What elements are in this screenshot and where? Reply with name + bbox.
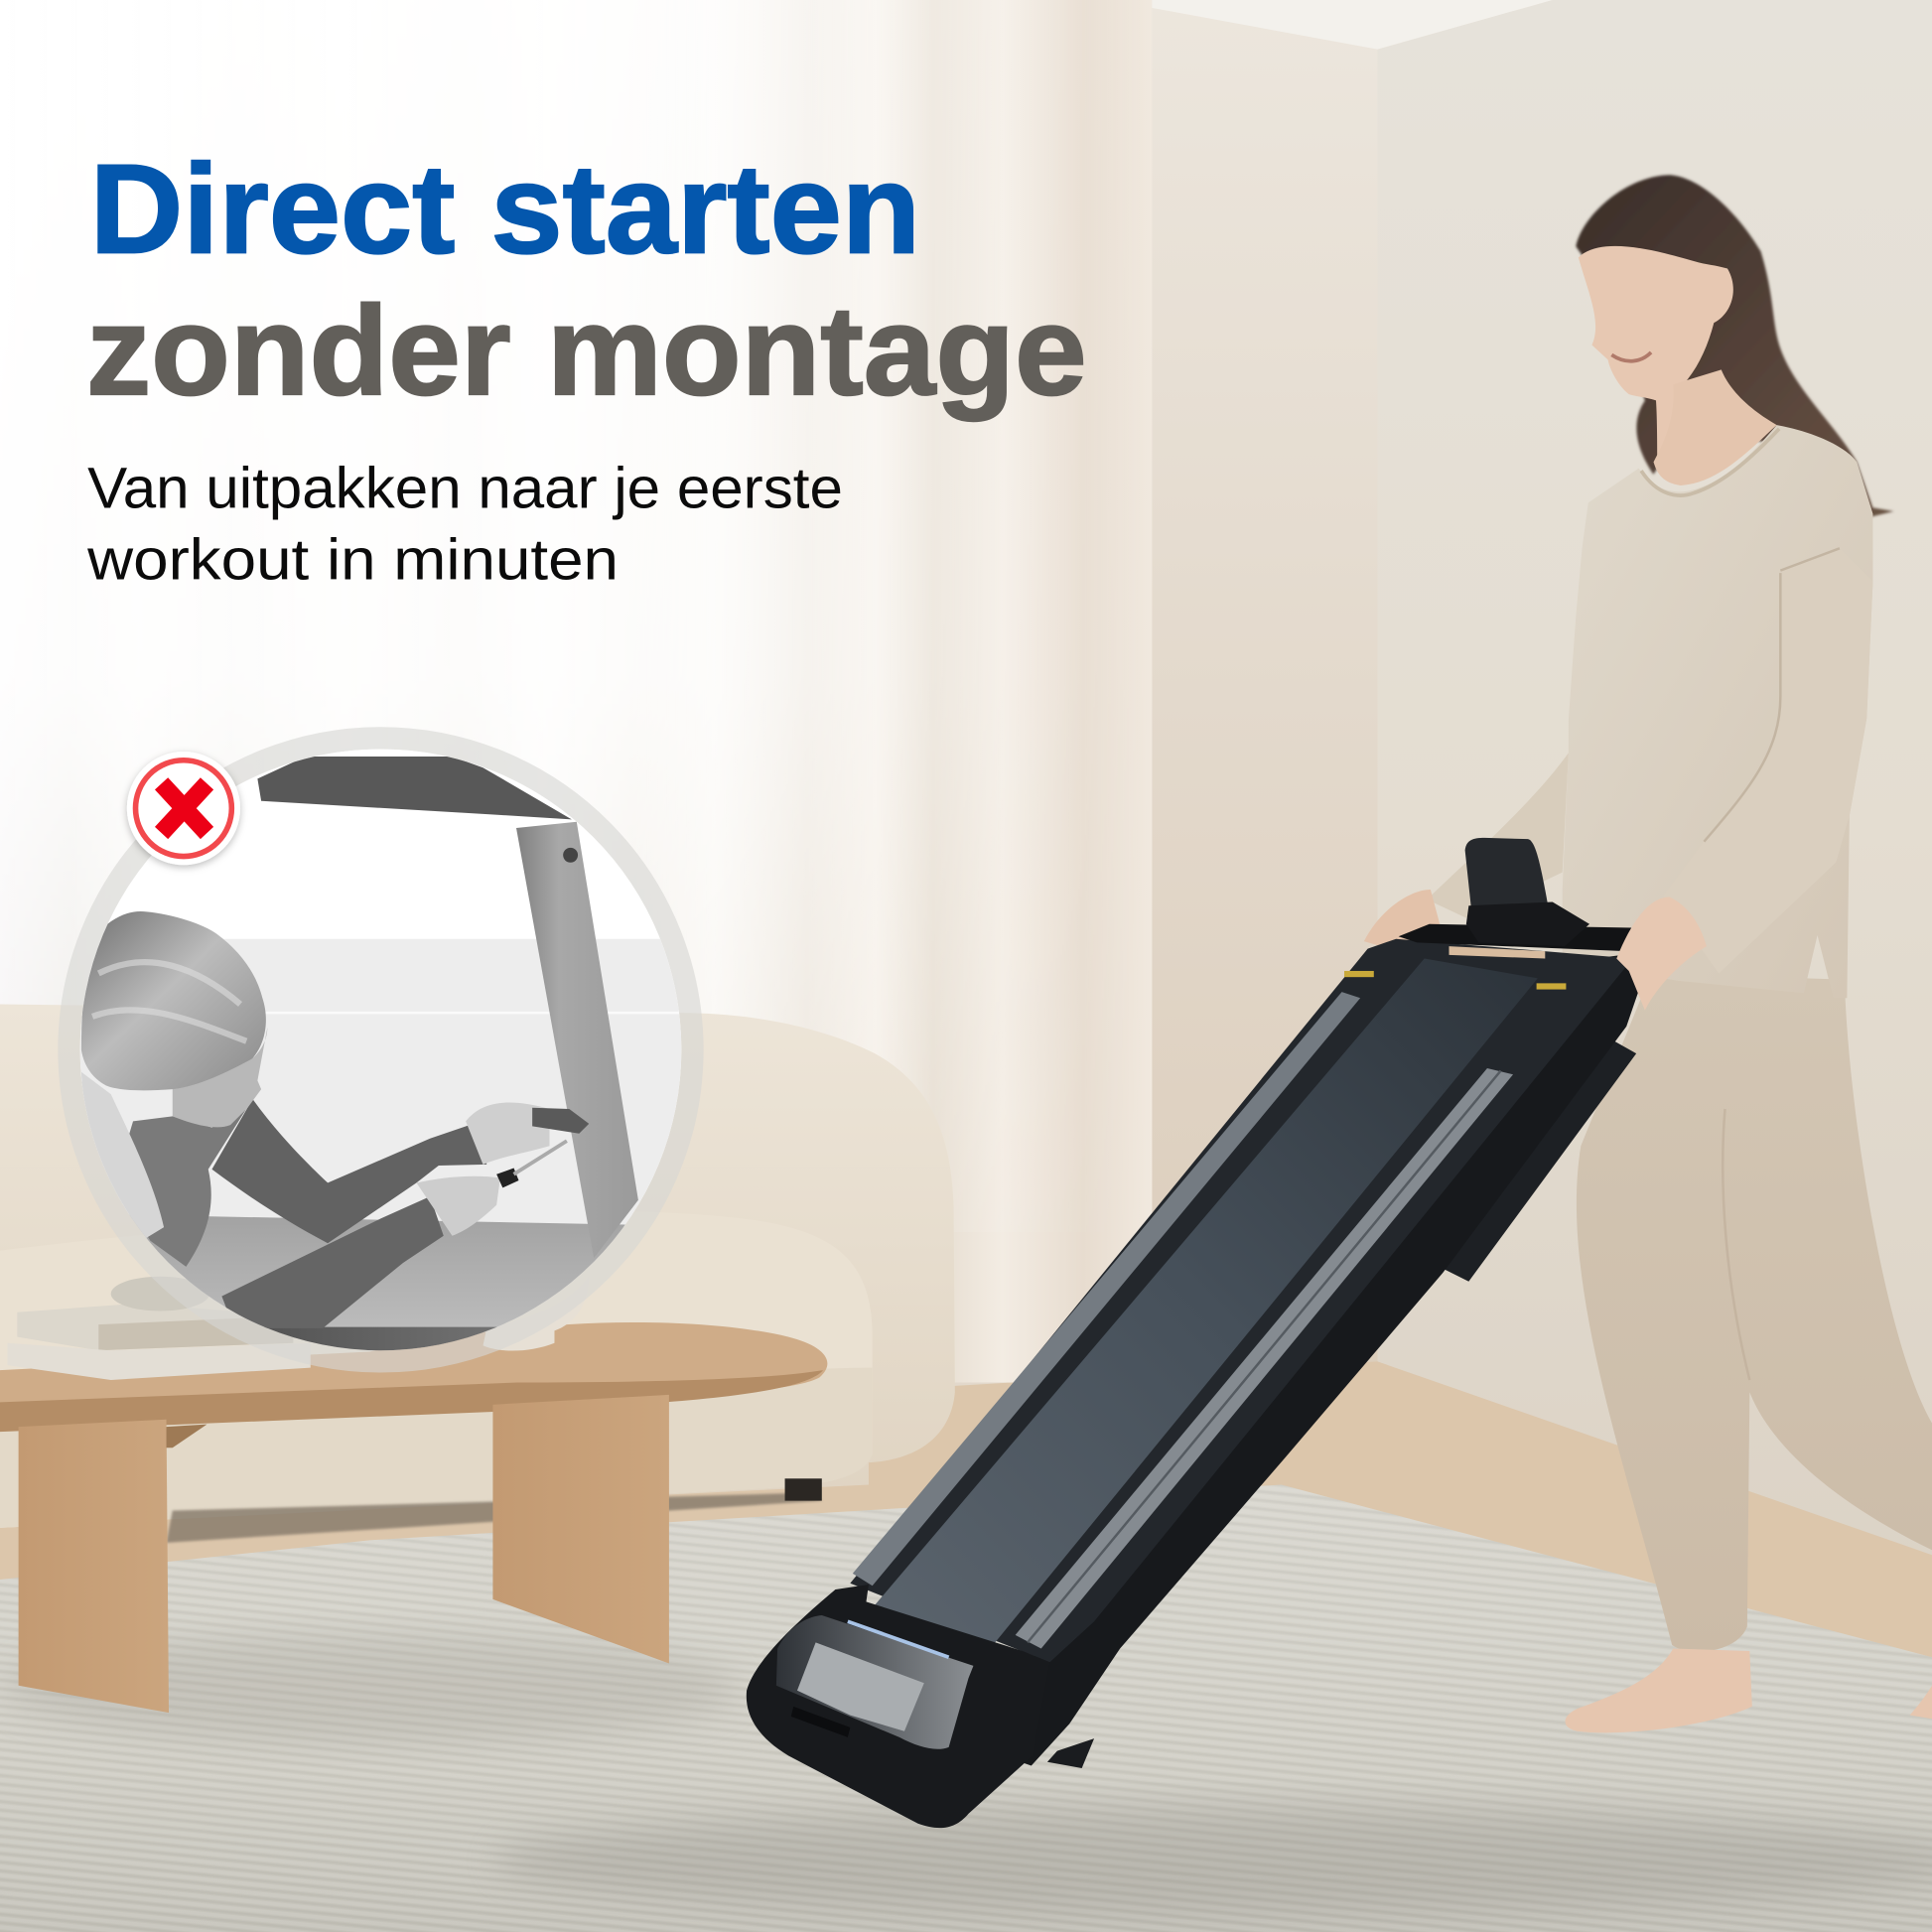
hair — [81, 911, 266, 1090]
foot — [1566, 1649, 1752, 1732]
wood floor — [0, 1361, 1932, 1657]
handlebar — [1399, 924, 1654, 951]
led strip — [848, 1621, 949, 1657]
treadmill rear box — [1440, 1027, 1636, 1282]
rug — [0, 1484, 1932, 1932]
right hand — [1616, 897, 1707, 1011]
sweater — [1563, 425, 1872, 998]
sofa front — [0, 1368, 873, 1528]
base — [747, 1585, 1049, 1828]
title — [86, 138, 1087, 422]
right rail — [1016, 1068, 1513, 1649]
other foot — [1910, 1686, 1932, 1719]
torso — [129, 1108, 246, 1267]
treadmill deck — [850, 939, 1632, 1662]
hand on driver — [466, 1103, 550, 1165]
collar line — [1641, 429, 1779, 495]
sofa seat cushion — [0, 1211, 873, 1528]
frame beam — [257, 757, 572, 819]
yellow labels — [1344, 971, 1566, 990]
woman with treadmill — [747, 175, 1932, 1828]
left hand — [1364, 890, 1449, 959]
screwdrivers — [532, 1108, 589, 1134]
neck — [1654, 369, 1777, 485]
frame post — [516, 822, 638, 1258]
white wash overlay — [0, 0, 994, 1037]
back wall — [1146, 0, 1380, 1392]
face — [1579, 246, 1733, 471]
shadow under sofa — [167, 1493, 823, 1543]
hair back — [1576, 175, 1894, 517]
sofa back — [0, 1004, 955, 1528]
subtitle — [86, 456, 843, 592]
translucent ring — [69, 738, 692, 1361]
face — [173, 1028, 267, 1127]
gap strip — [1449, 946, 1545, 959]
assembly inset circle — [69, 738, 692, 1376]
treadmill under frame — [986, 951, 1652, 1765]
sofa — [0, 1004, 955, 1543]
upper arm — [211, 1099, 486, 1243]
trouser fold — [1723, 1109, 1749, 1380]
lower arm — [221, 1196, 444, 1328]
slot — [791, 1707, 850, 1737]
foot knob — [1047, 1738, 1094, 1768]
subtitle: workout in minuten — [86, 527, 619, 592]
running belt — [873, 959, 1538, 1645]
lower hand — [416, 1176, 500, 1236]
display panel — [797, 1642, 924, 1731]
phone holder — [1465, 838, 1589, 946]
curtain — [0, 0, 1152, 1382]
right sleeve — [1663, 548, 1872, 973]
base top plate — [776, 1615, 973, 1749]
coffee table — [0, 1322, 827, 1713]
black and white photo — [73, 740, 690, 1376]
side wall — [1378, 0, 1932, 1651]
hair streaks — [92, 962, 246, 1041]
smile — [1611, 352, 1651, 361]
ceiling — [1109, 0, 1553, 50]
long hair — [81, 1072, 164, 1241]
title: Direct starten — [90, 138, 920, 280]
subtitle: Van uitpakken naar je eerste — [87, 456, 843, 520]
trousers — [1577, 973, 1932, 1652]
red cross badge — [127, 752, 240, 865]
left sleeve — [1427, 753, 1569, 918]
books, bowl and vase — [7, 1276, 589, 1380]
sleeve seam — [1704, 548, 1840, 842]
title: zonder montage — [86, 280, 1087, 422]
left rail — [853, 992, 1360, 1586]
